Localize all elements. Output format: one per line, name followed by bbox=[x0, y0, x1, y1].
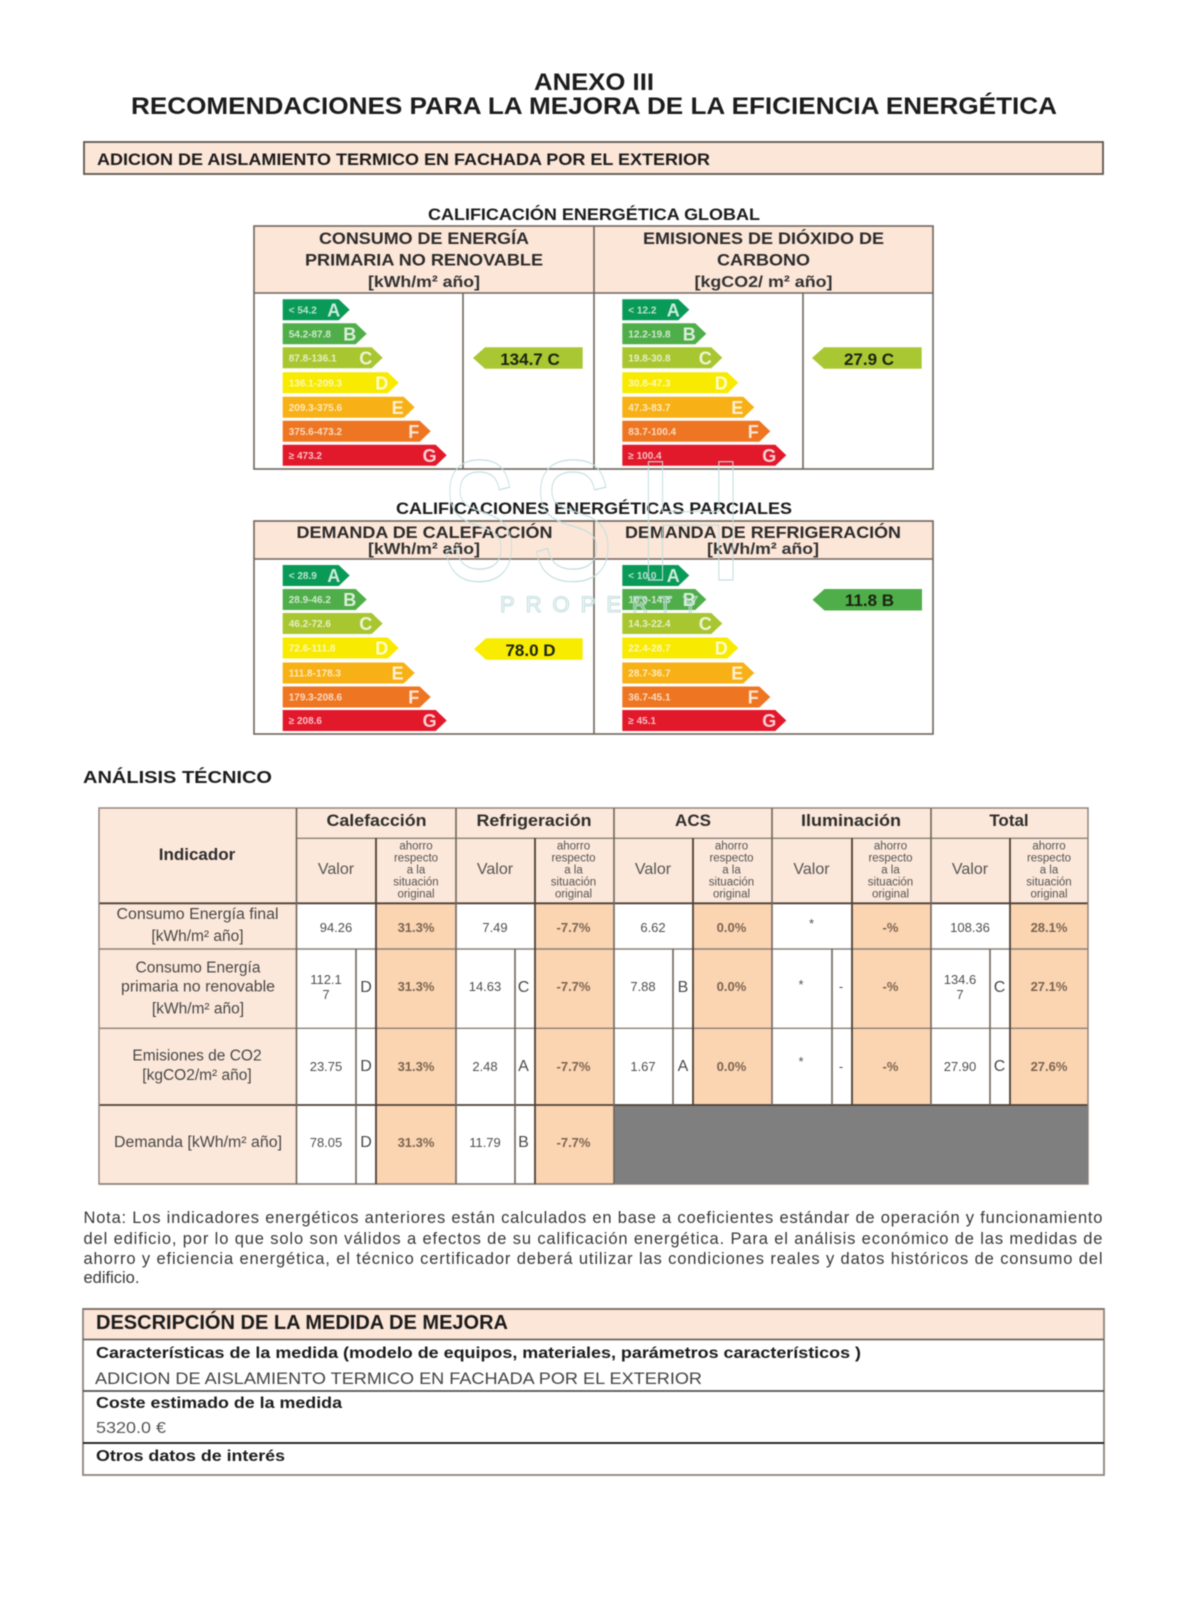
table header row: Refrigeración bbox=[476, 811, 592, 830]
note text bbox=[84, 1209, 1102, 1287]
table row: CO2 emissions: C bbox=[994, 1058, 1005, 1075]
table row: final energy: [kWh/m² año] bbox=[151, 928, 244, 945]
energy scale: cooling demand: 36.7-45.1 bbox=[628, 692, 671, 704]
energy scale: CO2 emissions: A bbox=[667, 300, 680, 320]
watermark: S bbox=[441, 424, 517, 617]
table header row: Indicador bbox=[159, 845, 236, 864]
rating arrow: 11.8 B bbox=[812, 589, 922, 610]
table header row: respecto bbox=[394, 852, 438, 864]
watermark bbox=[441, 424, 745, 617]
energy scale: heating demand: C bbox=[359, 614, 372, 634]
table header row: a la bbox=[1040, 864, 1059, 876]
rating arrow: 11.8 B: 11.8 B bbox=[845, 591, 894, 610]
table row: CO2 emissions: A bbox=[518, 1058, 529, 1075]
table row: CO2 emissions: D bbox=[360, 1058, 372, 1075]
title: ANEXO III bbox=[534, 69, 654, 96]
energy scale: cooling demand: G bbox=[762, 711, 776, 731]
header: heating demand: DEMANDA DE CALEFACCIÓN bbox=[296, 523, 552, 542]
table header row: original bbox=[1030, 888, 1068, 900]
energy scale: cooling demand: D bbox=[715, 638, 728, 658]
energy scale: cooling demand bbox=[622, 565, 786, 731]
table row: CO2 emissions: 27.90 bbox=[944, 1059, 976, 1074]
estimated cost: Coste estimado de la medida bbox=[96, 1395, 342, 1412]
energy scale: CO2 emissions: C bbox=[699, 348, 712, 368]
title: RECOMENDACIONES PARA LA MEJORA DE LA EFICIENCIA ENERGÉTICA bbox=[131, 92, 1057, 120]
description heading: DESCRIPCIÓN DE LA MEDIDA DE MEJORA bbox=[96, 1310, 508, 1334]
table header row: respecto bbox=[709, 852, 754, 864]
table row: primary energy: primaria no renovable bbox=[121, 979, 275, 996]
table row: primary energy: 134.6 bbox=[944, 972, 976, 987]
energy scale: CO2 emissions: 83.7-100.4 bbox=[628, 427, 677, 438]
table row: final energy: 31.3% bbox=[398, 920, 435, 935]
table header row bbox=[159, 811, 1072, 900]
table row: CO2 emissions: A bbox=[678, 1058, 689, 1075]
table row: primary energy: [kWh/m² año] bbox=[152, 1000, 244, 1018]
table header row: ahorro bbox=[399, 840, 433, 852]
energy scale: primary energy: F bbox=[408, 422, 419, 442]
table row: CO2 emissions: 27.6% bbox=[1031, 1059, 1068, 1074]
other data: Otros datos de interés bbox=[96, 1448, 285, 1465]
table row: final energy: -% bbox=[883, 920, 899, 935]
table header row: a la bbox=[881, 864, 900, 876]
energy scale: heating demand: F bbox=[408, 688, 419, 708]
energy scale: primary energy: C bbox=[359, 348, 372, 368]
energy scale: heating demand: 72.6-111.8 bbox=[289, 644, 336, 654]
header: primary energy: CONSUMO DE ENERGÍA bbox=[319, 229, 529, 248]
table header row: situación bbox=[551, 876, 596, 888]
table row: primary energy: - bbox=[839, 979, 843, 994]
table row: primary energy: B bbox=[678, 979, 688, 996]
estimated cost: 5320.0 € bbox=[96, 1420, 166, 1437]
energy scale: primary energy: 87.8-136.1 bbox=[289, 353, 337, 364]
energy scale: CO2 emissions: E bbox=[731, 398, 743, 418]
table header row: original bbox=[872, 888, 909, 900]
header: cooling demand: [kWh/m² año] bbox=[707, 541, 819, 558]
table header row: original bbox=[713, 888, 750, 900]
table row: primary energy bbox=[121, 960, 1068, 1018]
energy scale: heating demand: E bbox=[392, 664, 404, 684]
table row: CO2 emissions: -% bbox=[883, 1059, 899, 1074]
heading: global rating: CALIFICACIÓN ENERGÉTICA GLOBAL bbox=[428, 205, 760, 224]
note text: edificio. bbox=[84, 1269, 139, 1287]
table: technical analysis bbox=[99, 808, 1088, 1184]
energy scale: CO2 emissions: B bbox=[683, 324, 696, 344]
measure title banner bbox=[84, 142, 1103, 174]
energy scale: CO2 emissions: 30.8-47.3 bbox=[628, 378, 671, 389]
energy scale: cooling demand: F bbox=[748, 688, 759, 708]
table row: CO2 emissions: 1.67 bbox=[630, 1059, 656, 1074]
header: cooling demand: DEMANDA DE REFRIGERACIÓN bbox=[625, 523, 901, 542]
table row: CO2 emissions: 0.0% bbox=[717, 1059, 747, 1074]
table row: demand: Demanda [kWh/m² año] bbox=[114, 1134, 282, 1151]
table header row: Valor bbox=[793, 861, 830, 878]
table row: CO2 emissions: * bbox=[798, 1054, 804, 1069]
energy scale: cooling demand: 14.3-22.4 bbox=[628, 619, 671, 630]
table header row: a la bbox=[407, 864, 426, 876]
energy scale: cooling demand: A bbox=[667, 566, 680, 586]
table header row: original bbox=[397, 888, 435, 900]
table row: primary energy: 0.0% bbox=[717, 979, 747, 994]
energy scale: CO2 emissions bbox=[622, 299, 786, 466]
table row: CO2 emissions: [kgCO2/m² año] bbox=[142, 1067, 252, 1084]
header: cooling demand bbox=[625, 523, 901, 558]
table row: primary energy: Consumo Energía bbox=[136, 960, 261, 977]
header: heating demand bbox=[296, 523, 552, 558]
header: heating demand: [kWh/m² año] bbox=[368, 541, 480, 558]
table row: primary energy: C bbox=[994, 979, 1005, 996]
table row: final energy: Consumo Energía final bbox=[116, 906, 278, 923]
estimated cost bbox=[96, 1395, 342, 1437]
table header row: respecto bbox=[1027, 852, 1071, 864]
energy scale: CO2 emissions: 47.3-83.7 bbox=[628, 403, 671, 414]
energy scale: heating demand: G bbox=[423, 711, 437, 731]
rating arrow: 134.7 C: 134.7 C bbox=[500, 350, 560, 369]
energy scale: CO2 emissions: D bbox=[715, 373, 728, 393]
energy scale: cooling demand: B bbox=[683, 590, 696, 610]
watermark: PROPERTY bbox=[500, 592, 709, 617]
table row: primary energy: 7.88 bbox=[630, 979, 656, 994]
table row: demand: B bbox=[518, 1134, 529, 1151]
energy scale: CO2 emissions: F bbox=[748, 422, 759, 442]
measure title banner: ADICION DE AISLAMIENTO TERMICO EN FACHADA POR EL EXTERIOR bbox=[97, 150, 710, 169]
table row: final energy: 6.62 bbox=[640, 920, 666, 935]
table header row: Valor bbox=[635, 861, 672, 878]
energy scale: heating demand: A bbox=[327, 566, 340, 586]
table row: final energy: 28.1% bbox=[1031, 920, 1068, 935]
heading: technical analysis: ANÁLISIS TÉCNICO bbox=[83, 766, 272, 787]
energy scale: primary energy: ≥ 473.2 bbox=[289, 451, 322, 462]
table header row: situación bbox=[709, 876, 754, 888]
table row: final energy: 0.0% bbox=[717, 920, 747, 935]
rating arrow: 78.0 D bbox=[474, 638, 583, 660]
rating arrow: 134.7 C bbox=[473, 347, 583, 369]
panel: global rating bbox=[254, 226, 933, 469]
note text: del edificio, por lo que solo son válidos a efectos de su calificación energética. Para el análisis económico de las medidas de bbox=[84, 1230, 1102, 1248]
energy scale: cooling demand: 10.0-14.3 bbox=[628, 595, 671, 606]
energy scale: cooling demand: < 10.0 bbox=[628, 571, 657, 582]
table header row: situación bbox=[393, 876, 439, 888]
table header row: a la bbox=[722, 864, 741, 876]
table header row: situación bbox=[1026, 876, 1072, 888]
panel: improvement measure description bbox=[83, 1309, 1104, 1475]
energy scale: primary energy: 375.6-473.2 bbox=[289, 427, 343, 438]
measure characteristics: Características de la medida (modelo de equipos, materiales, parámetros característicos ) bbox=[96, 1345, 861, 1362]
energy scale: primary energy: E bbox=[392, 398, 404, 418]
table row: demand: D bbox=[360, 1134, 372, 1151]
table header row: respecto bbox=[551, 852, 596, 864]
table row: CO2 emissions: - bbox=[839, 1059, 843, 1074]
energy scale: CO2 emissions: 12.2-19.8 bbox=[628, 329, 671, 340]
energy scale: cooling demand: 22.4-28.7 bbox=[628, 644, 671, 654]
header: CO2 emissions bbox=[643, 229, 884, 291]
table row: demand bbox=[114, 1134, 591, 1151]
heading: partial ratings: CALIFICACIONES ENERGÉTICAS PARCIALES bbox=[396, 499, 792, 518]
measure characteristics: ADICION DE AISLAMIENTO TERMICO EN FACHADA POR EL EXTERIOR bbox=[95, 1369, 702, 1388]
table row: final energy: * bbox=[809, 916, 814, 931]
energy scale: heating demand: 28.9-46.2 bbox=[289, 595, 331, 606]
note text: Nota: Los indicadores energéticos anteriores están calculados en base a coeficientes estándar de operación y funcionamiento bbox=[84, 1209, 1102, 1227]
table header row: ahorro bbox=[715, 840, 748, 852]
energy scale: CO2 emissions: 19.8-30.8 bbox=[628, 353, 671, 364]
title bbox=[131, 69, 1057, 120]
energy scale: heating demand: 111.8-178.3 bbox=[289, 668, 341, 680]
energy scale: cooling demand: E bbox=[731, 664, 743, 684]
energy scale: heating demand: 179.3-208.6 bbox=[289, 692, 343, 704]
table row: demand: 11.79 bbox=[469, 1135, 501, 1150]
table row: final energy: -7.7% bbox=[557, 920, 591, 935]
energy scale: CO2 emissions: G bbox=[762, 446, 776, 466]
table row: demand: 78.05 bbox=[310, 1135, 342, 1150]
header: CO2 emissions: EMISIONES DE DIÓXIDO DE bbox=[643, 229, 884, 248]
watermark: H bbox=[636, 425, 745, 617]
table row: final energy: 94.26 bbox=[320, 920, 352, 935]
table header row: Calefacción bbox=[326, 811, 426, 830]
table row: primary energy: 7 bbox=[956, 987, 964, 1002]
energy scale: primary energy: G bbox=[423, 446, 437, 466]
table row: primary energy: 27.1% bbox=[1031, 979, 1068, 994]
table header row: ACS bbox=[675, 811, 711, 830]
energy scale: primary energy: 54.2-87.8 bbox=[289, 329, 331, 340]
table header row: Total bbox=[989, 811, 1029, 830]
table row: final energy bbox=[116, 906, 1068, 945]
rating arrow: 27.9 C: 27.9 C bbox=[844, 350, 894, 369]
header: primary energy bbox=[305, 229, 543, 291]
energy scale: primary energy: D bbox=[375, 373, 388, 393]
table row: primary energy: 112.1 bbox=[310, 972, 342, 987]
table row: final energy: 7.49 bbox=[482, 920, 508, 935]
energy scale: heating demand: B bbox=[343, 590, 356, 610]
energy scale: primary energy: 136.1-209.3 bbox=[289, 378, 343, 389]
energy scale: cooling demand: ≥ 45.1 bbox=[628, 716, 656, 727]
energy scale: primary energy: A bbox=[327, 300, 340, 320]
table header row: ahorro bbox=[557, 840, 590, 852]
measure characteristics bbox=[95, 1345, 861, 1388]
table row: primary energy: * bbox=[798, 977, 804, 992]
table row: demand: -7.7% bbox=[557, 1135, 591, 1150]
table row: demand: 31.3% bbox=[398, 1135, 435, 1150]
note text: ahorro y eficiencia energética, el técnico certificador deberá utilizar las condiciones reales y datos históricos de consumo del bbox=[84, 1250, 1102, 1268]
table row: CO2 emissions: -7.7% bbox=[557, 1059, 591, 1074]
table header row: Valor bbox=[952, 861, 989, 878]
table row: primary energy: -7.7% bbox=[557, 979, 591, 994]
panel: partial ratings bbox=[254, 521, 933, 734]
table header row: situación bbox=[868, 876, 913, 888]
table header row: Valor bbox=[477, 861, 514, 878]
table header row: ahorro bbox=[874, 840, 907, 852]
table row: CO2 emissions: 2.48 bbox=[472, 1059, 498, 1074]
table row: final energy: 108.36 bbox=[950, 920, 990, 935]
header: primary energy: [kWh/m² año] bbox=[368, 274, 480, 291]
table row: primary energy: -% bbox=[883, 979, 899, 994]
header: primary energy: PRIMARIA NO RENOVABLE bbox=[305, 250, 543, 270]
table row: CO2 emissions: Emisiones de CO2 bbox=[132, 1048, 262, 1065]
table header row: Valor bbox=[318, 861, 355, 878]
header: CO2 emissions: CARBONO bbox=[717, 250, 810, 270]
table row: primary energy: D bbox=[360, 979, 372, 996]
table row: primary energy: 31.3% bbox=[398, 979, 435, 994]
table header row: original bbox=[555, 888, 592, 900]
watermark: S bbox=[531, 424, 614, 617]
table row: primary energy: 7 bbox=[322, 987, 330, 1002]
table header row: respecto bbox=[868, 852, 913, 864]
energy scale: heating demand: D bbox=[375, 638, 388, 658]
header: CO2 emissions: [kgCO2/ m² año] bbox=[694, 274, 832, 291]
energy scale: heating demand: ≥ 208.6 bbox=[289, 716, 322, 727]
energy scale: cooling demand: C bbox=[699, 614, 712, 634]
table row: primary energy: 14.63 bbox=[469, 979, 501, 994]
energy scale: primary energy: 209.3-375.6 bbox=[289, 403, 343, 414]
table row: CO2 emissions: 23.75 bbox=[310, 1059, 342, 1074]
table header row: ahorro bbox=[1032, 840, 1066, 852]
rating arrow: 78.0 D: 78.0 D bbox=[505, 641, 556, 660]
energy scale: primary energy bbox=[283, 299, 447, 466]
energy scale: heating demand: 46.2-72.6 bbox=[289, 619, 331, 630]
table header row: Iluminación bbox=[801, 811, 901, 830]
table row: CO2 emissions bbox=[132, 1048, 1068, 1084]
energy scale: CO2 emissions: < 12.2 bbox=[628, 305, 657, 316]
energy scale: cooling demand: 28.7-36.7 bbox=[628, 668, 671, 680]
energy scale: heating demand bbox=[283, 565, 447, 731]
table header row: a la bbox=[564, 864, 583, 876]
energy scale: heating demand: < 28.9 bbox=[289, 571, 317, 582]
rating arrow: 27.9 C bbox=[812, 347, 922, 369]
energy scale: primary energy: < 54.2 bbox=[289, 305, 317, 316]
table row: CO2 emissions: 31.3% bbox=[398, 1059, 435, 1074]
energy scale: primary energy: B bbox=[343, 324, 356, 344]
energy scale: CO2 emissions: ≥ 100.4 bbox=[628, 451, 662, 462]
table row: primary energy: C bbox=[518, 979, 529, 996]
